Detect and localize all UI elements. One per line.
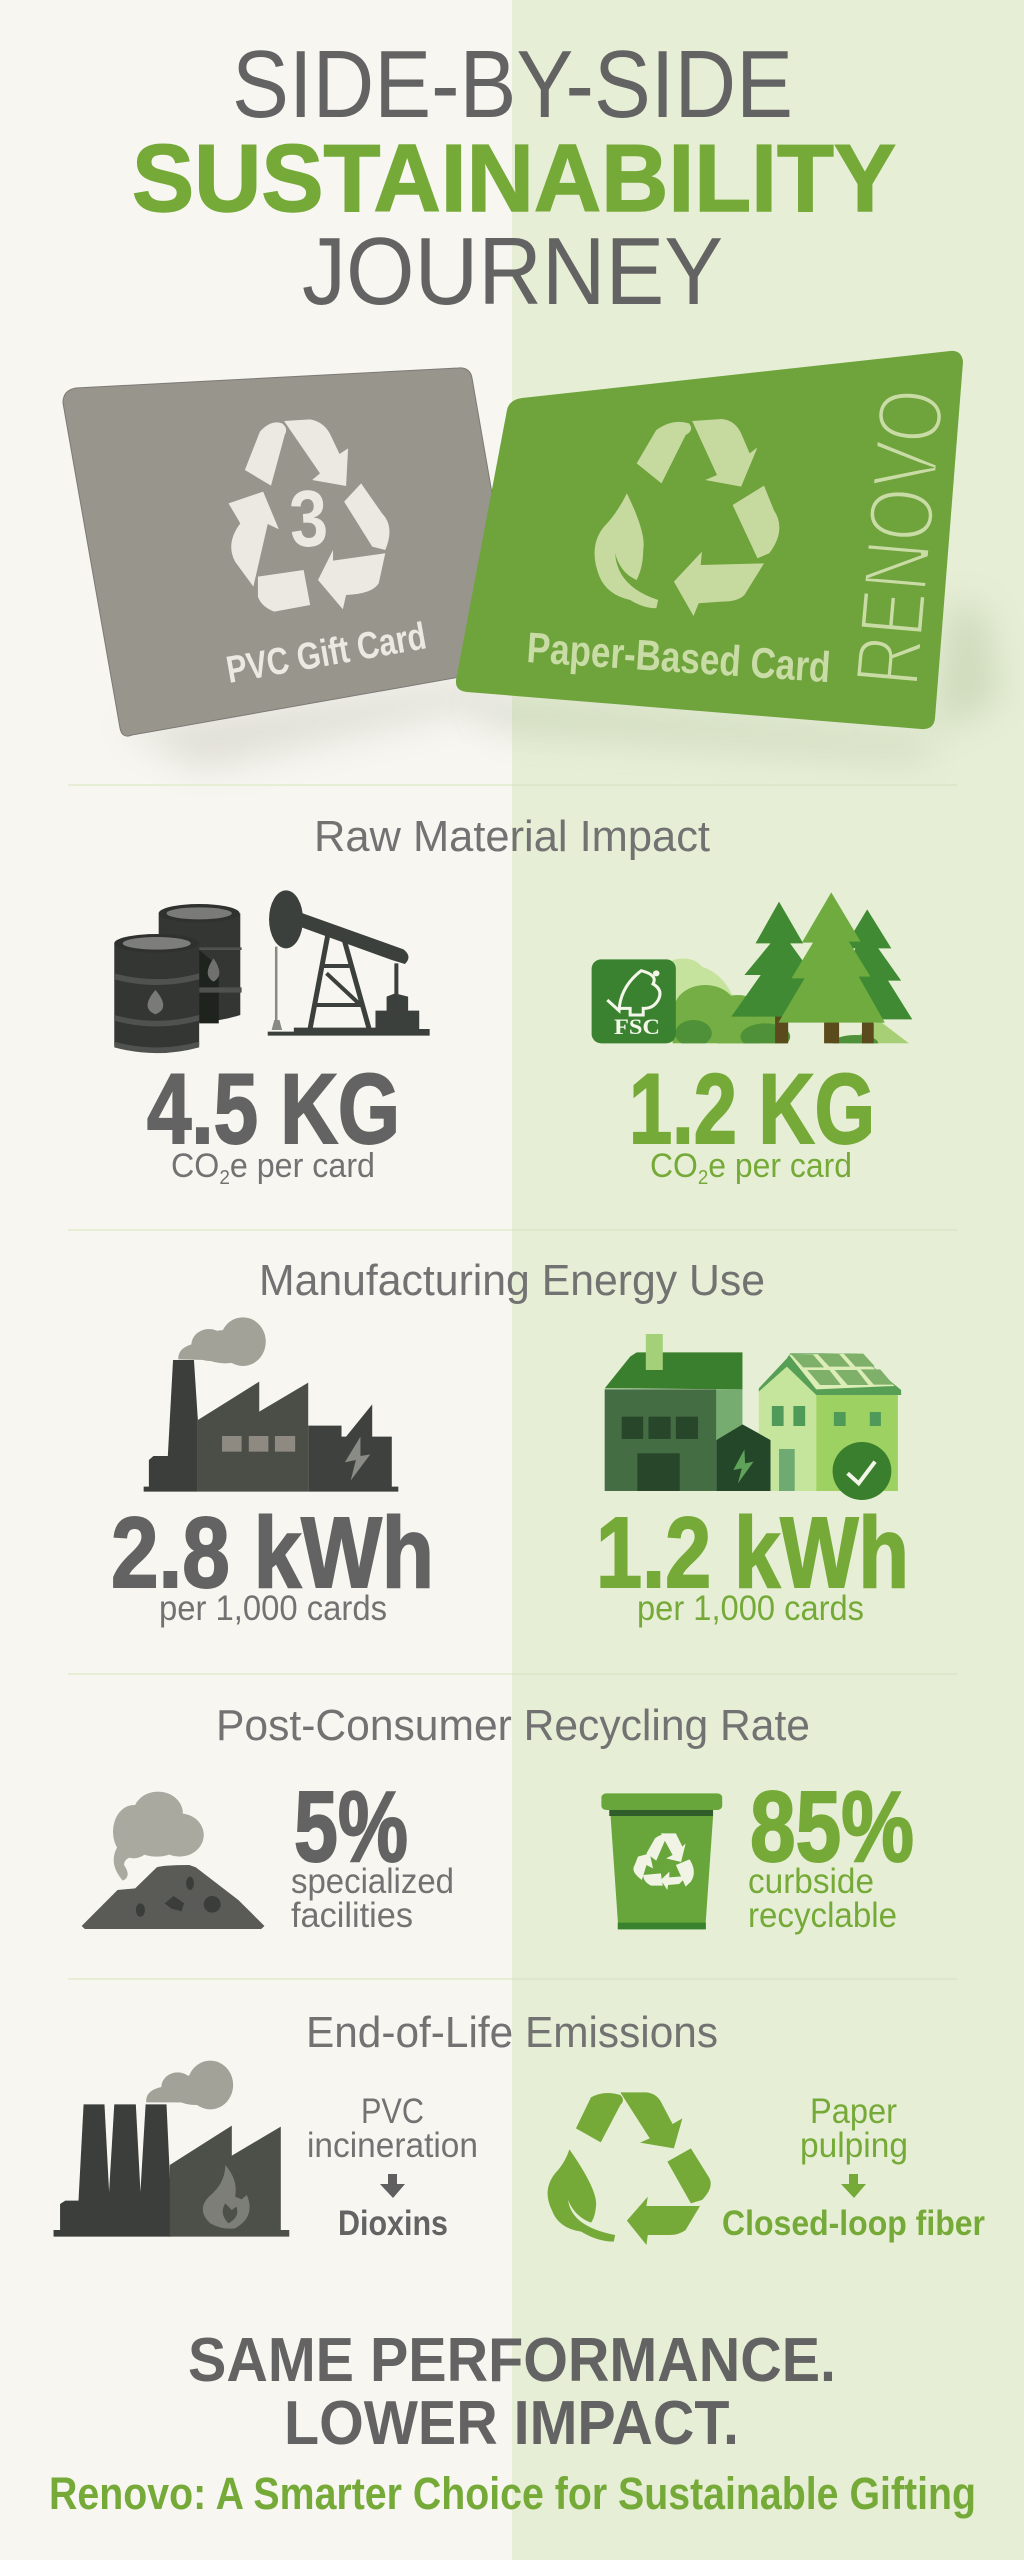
caption: CO2e per card (PVC): e per card	[230, 1147, 375, 1185]
heading: Post-Consumer Recycling Rate: Post-Consumer Recycling Rate	[216, 1701, 810, 1750]
text block: PVC incineration to dioxins: PVC	[361, 2092, 424, 2131]
icon: oil pumpjack	[268, 890, 430, 1036]
icon: polluting factory with smoke	[144, 1317, 398, 1492]
stat: 85% curbside recyclable: curbside	[748, 1862, 874, 1901]
icon: recycling symbol with number 3: 3	[287, 473, 330, 564]
title	[132, 31, 896, 325]
stat: 85% curbside recyclable	[748, 1771, 914, 1935]
brand: RENOVO: RENOVO	[836, 385, 964, 690]
text block: PVC incineration to dioxins: incineration	[307, 2126, 478, 2165]
icon: green recycling bin	[601, 1793, 722, 1929]
heading: Manufacturing Energy Use: Manufacturing Energy Use	[259, 1256, 765, 1305]
card: paper-based card	[456, 351, 964, 729]
caption: CO2e per card (PVC): CO	[171, 1147, 222, 1185]
closing statement	[188, 2326, 836, 2458]
caption: CO2e per card (paper): CO	[650, 1147, 701, 1185]
caption: CO2e per card (paper): 2	[698, 1167, 708, 1189]
caption: CO2e per card (paper): e per card	[708, 1147, 852, 1185]
icon: recycling symbol with leaf	[548, 2092, 711, 2245]
caption: per 1,000 cards (PVC): per 1,000 cards	[159, 1589, 387, 1628]
arrow: down (PVC)	[380, 2174, 405, 2198]
stat: 1.2 kWh: 1.2 kWh	[596, 1497, 909, 1609]
text block: paper pulping to closed-loop fiber: Paper	[810, 2092, 897, 2131]
panel: paper side background	[512, 0, 1024, 2560]
stat: 5% specialized facilities: facilities	[291, 1896, 413, 1935]
badge label: FSC: FSC	[614, 1014, 660, 1039]
stat: 85% curbside recyclable: 85%	[750, 1771, 914, 1883]
icon: recycling symbol with leaf	[595, 419, 779, 616]
icon: FSC badge and forest	[592, 892, 912, 1052]
card: PVC gift card	[63, 368, 522, 736]
icon: green factory and solar house	[605, 1334, 901, 1500]
stat: 1.2 KG: 1.2 KG	[629, 1053, 875, 1164]
icon: smoking waste pile	[82, 1792, 264, 1929]
card label: PVC Gift Card: PVC Gift Card	[223, 615, 429, 692]
closing statement: SAME PERFORMANCE.	[188, 2326, 836, 2395]
stat: 5% specialized facilities	[291, 1771, 454, 1935]
text block: PVC incineration to dioxins	[307, 2092, 478, 2243]
stat: 4.5 KG: 4.5 KG	[147, 1053, 400, 1164]
card label: Paper-Based Card: Paper-Based Card	[525, 624, 832, 692]
title: SIDE-BY-SIDE	[232, 31, 793, 138]
closing statement: LOWER IMPACT.	[284, 2389, 739, 2458]
card shadows	[121, 600, 1000, 770]
stat: 2.8 kWh: 2.8 kWh	[111, 1497, 434, 1609]
stat: 5% specialized facilities: specialized	[291, 1862, 454, 1901]
heading: End-of-Life Emissions: End-of-Life Emissions	[306, 2008, 718, 2057]
title: JOURNEY	[302, 218, 723, 325]
icon: recycling symbol with number 3	[229, 419, 389, 612]
text block: paper pulping to closed-loop fiber: Closed-loop fiber	[722, 2204, 985, 2243]
text block: paper pulping to closed-loop fiber	[722, 2092, 985, 2243]
stat: 85% curbside recyclable: recyclable	[748, 1896, 897, 1935]
arrow: down (paper)	[841, 2174, 866, 2198]
panel: PVC side background	[0, 0, 512, 2560]
stat: 1.2 KG	[629, 1053, 875, 1189]
caption: per 1,000 cards (paper): per 1,000 cards	[637, 1589, 864, 1628]
stat: 5% specialized facilities: 5%	[294, 1771, 408, 1883]
heading: Raw Material Impact: Raw Material Impact	[314, 812, 710, 861]
icon: incineration factory	[54, 2061, 289, 2237]
caption: CO2e per card (PVC): 2	[219, 1167, 230, 1189]
title: SUSTAINABILITY	[132, 125, 896, 232]
icon: oil barrels	[114, 904, 242, 1053]
text block: paper pulping to closed-loop fiber: pulping	[800, 2126, 908, 2165]
stat: 4.5 KG	[147, 1053, 400, 1189]
text block: PVC incineration to dioxins: Dioxins	[338, 2204, 448, 2243]
